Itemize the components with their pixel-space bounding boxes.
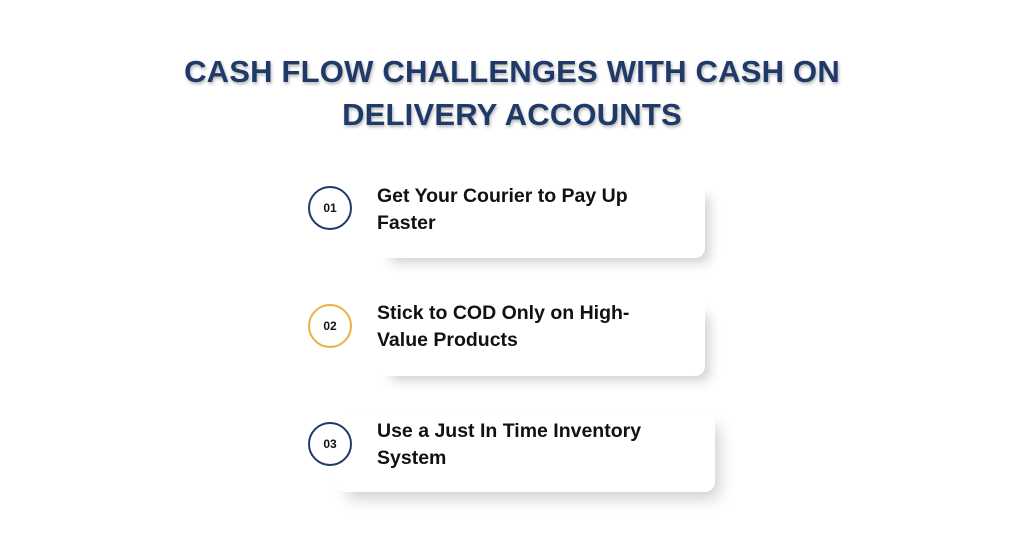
text 1: Faster [377, 212, 436, 234]
circle 02 [308, 304, 352, 348]
title [184, 54, 840, 132]
circle 01: 01 [323, 201, 337, 215]
card shadow 1 [375, 180, 705, 258]
item 3 [308, 420, 641, 469]
card shadow 2 [375, 298, 705, 376]
circle 03 [308, 422, 352, 466]
card shadow 3 [335, 412, 715, 492]
item 1 [308, 185, 628, 234]
text 3 [377, 420, 641, 469]
text 2 [377, 302, 629, 351]
text 1: Get Your Courier to Pay Up [377, 185, 628, 207]
text 2: Value Products [377, 329, 518, 351]
circle 03: 03 [323, 437, 337, 451]
circle 02: 02 [323, 319, 337, 333]
text 3: Use a Just In Time Inventory [377, 420, 641, 442]
text 1 [377, 185, 628, 234]
title: CASH FLOW CHALLENGES WITH CASH ON [184, 54, 840, 89]
circle 01 [308, 186, 352, 230]
title: DELIVERY ACCOUNTS [342, 97, 682, 132]
item 2 [308, 302, 629, 351]
text 3: System [377, 447, 446, 469]
text 2: Stick to COD Only on High- [377, 302, 629, 324]
